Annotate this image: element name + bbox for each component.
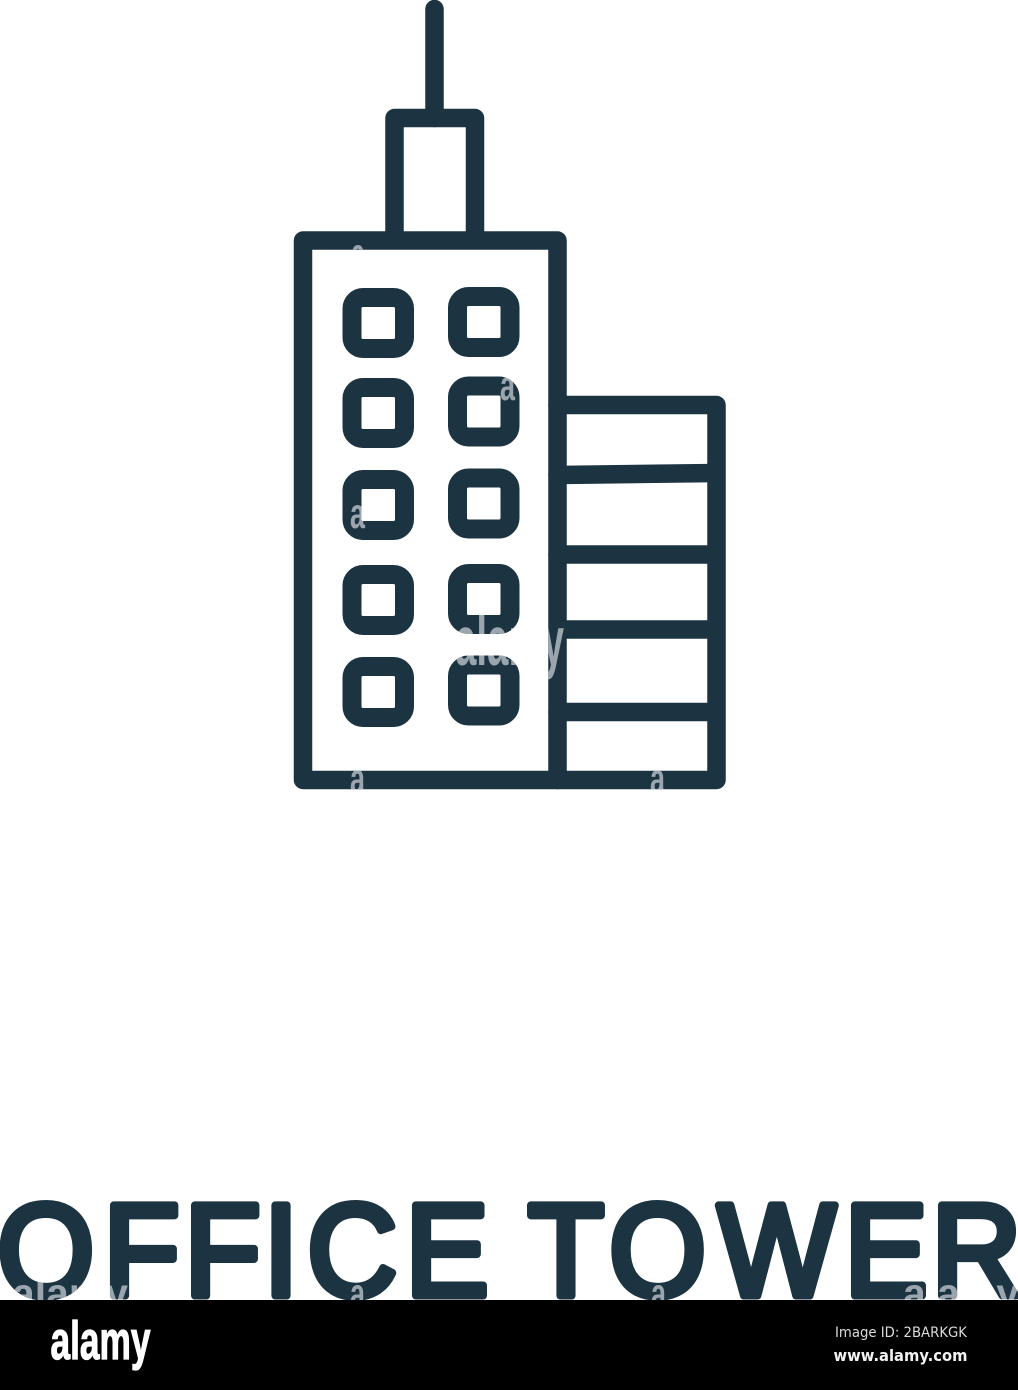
- watermarks: [12, 230, 1018, 1318]
- watermark glyph a: a: [500, 362, 516, 410]
- watermark glyph a: a: [350, 1270, 366, 1318]
- footer bar: [0, 1300, 1018, 1390]
- icon: office tower: [303, 9, 716, 780]
- spire: [425, 9, 444, 118]
- website: www.alamy.com: [834, 1346, 968, 1365]
- main tower outline: [303, 240, 558, 780]
- watermark word: alamy: [455, 602, 564, 680]
- watermark glyph a: a: [651, 1270, 667, 1318]
- image id: Image ID: 2BARKGK: [835, 1325, 968, 1341]
- watermark glyph a: a: [350, 755, 366, 803]
- side building: [558, 405, 716, 780]
- watermark word left: alamy: [12, 1270, 128, 1318]
- watermark glyph a: a: [350, 490, 366, 538]
- watermark glyph a: a: [650, 755, 666, 803]
- tower crown: [394, 118, 475, 240]
- alamy logo: alamy: [50, 1311, 150, 1371]
- watermark glyph a: a: [351, 230, 366, 278]
- title: OFFICE TOWER: [0, 1178, 1018, 1324]
- windows: [352, 296, 510, 718]
